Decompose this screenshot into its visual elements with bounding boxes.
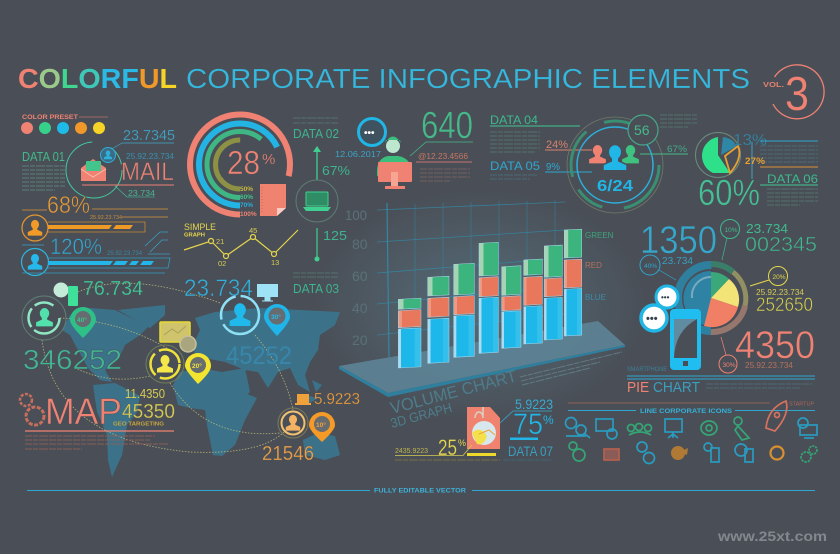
icon: chat bubbles: ••• (646, 313, 658, 325)
line chart: simple graph: 13 (271, 258, 279, 267)
panel: pie chart: 252650 (756, 295, 813, 316)
panel: data 07: DATA 07 (508, 444, 553, 459)
panel: data 04 05 team: 56 (634, 122, 650, 138)
chart grid (377, 200, 565, 357)
panel: mail (22, 127, 175, 198)
panel: mail: MAIL (121, 158, 174, 186)
panel: 640 person (335, 105, 473, 189)
icon: chat bubbles: ••• (661, 293, 670, 302)
panel: data 06 pie: 27% (745, 156, 765, 166)
icon: smartphone (670, 309, 701, 370)
bars (398, 229, 582, 368)
panel: pie chart: 23.734 (746, 221, 788, 236)
axis labels (345, 207, 368, 348)
icon: note page (260, 184, 286, 216)
map node: green: 346252 (23, 344, 122, 375)
map node: orange: 10° (316, 421, 326, 429)
panel: data 07: 2435.9223 (395, 446, 428, 455)
chart: 3D volume chart (315, 190, 645, 431)
line chart: simple graph: 21 (216, 237, 224, 246)
map node: blue: 45252 (226, 342, 292, 370)
panel: pie chart: 1350 (640, 219, 717, 262)
icon row 2 (569, 442, 585, 461)
panel: progress 68 percent: 68% (47, 192, 90, 219)
panel: 640 person: 640 (421, 105, 473, 147)
panel: pie chart (627, 219, 817, 396)
panel: data 06 pie (696, 132, 818, 213)
map node: yellow: 20° (192, 362, 202, 370)
panel: pie chart: 40% (644, 263, 657, 270)
title: colorful: COLORFUL (18, 63, 177, 94)
line chart: simple graph: 02 (218, 259, 226, 268)
panel: data 04 05 team (490, 115, 698, 213)
panel: radial chart 28 percent: 50% (240, 186, 253, 193)
icon: document (467, 407, 500, 449)
panel: pie chart: 25.92.23.734 (756, 287, 804, 297)
map node: green (22, 278, 143, 375)
panel: data 06 pie: DATA 06 (767, 172, 818, 186)
panel: map heading: 45350 (122, 401, 175, 423)
world map (62, 305, 340, 477)
panel: data 04 05 team: 6/24 (597, 178, 633, 195)
panel: data 07: 25 (438, 435, 457, 460)
chart caption (388, 352, 622, 431)
line chart: simple graph: 45 (249, 226, 257, 235)
panel: 640 person: 12.06.2017 (335, 149, 381, 159)
platform (339, 321, 625, 397)
line chart: simple graph: SIMPLE (184, 222, 216, 233)
panel: pie chart: 20% (772, 274, 786, 281)
map node: orange (262, 391, 360, 465)
panel: map heading: 11.4350 (125, 387, 165, 401)
panel: mail: 23.7345 (123, 127, 175, 144)
panel: progress 68 percent: 25.92.23.734 (90, 215, 122, 221)
title: corporate infographic elements: CORPORATE INFOGRAPHIC ELEMENTS (186, 63, 750, 94)
map node: orange: 5.9223 (314, 391, 360, 408)
icon: chat bubbles (641, 286, 678, 331)
panel: map heading (20, 387, 175, 449)
panel: data 02 and 03 column: DATA 03 (293, 281, 339, 296)
panel: progress 120 percent: 25.92.23.734 (107, 251, 143, 257)
panel: data 07 (395, 397, 554, 460)
panel: radial chart 28 percent (190, 114, 290, 218)
panel: pie chart: 4350 (735, 324, 815, 367)
map node: blue: 23.734 (184, 275, 253, 302)
chart legend (585, 231, 614, 302)
panel: data 06 pie: 60% (698, 172, 760, 213)
axis labels: 20 (352, 332, 368, 348)
panel: line corporate icons: LINE CORPORATE ICONS (640, 408, 732, 415)
map connection curves (42, 283, 293, 452)
chart caption: 3D GRAPH (389, 400, 454, 431)
footer rule and caption: FULLY EDITABLE VECTOR (374, 488, 466, 494)
panel: pie chart: PIE CHART (627, 379, 700, 396)
panel: progress 120 percent: 120% (50, 234, 102, 259)
panel: pie chart: 30% (722, 362, 736, 369)
map node: blue (184, 275, 292, 370)
panel: radial chart 28 percent: % (262, 151, 275, 168)
panel: 640 person: ••• (364, 128, 375, 139)
volume badge: VOL. (763, 80, 784, 89)
axis labels: 40 (352, 300, 368, 316)
panel: data 07: 5.9223 (515, 397, 553, 412)
axis labels: 80 (352, 236, 368, 252)
panel: pie chart: 10% (724, 227, 738, 234)
panel: progress 68 percent (22, 192, 168, 241)
panel: radial chart 28 percent: 100% (240, 211, 257, 218)
panel: 640 person: @12.23.4566 (418, 152, 469, 161)
panel: data 04 05 team: 67% (667, 144, 688, 155)
panel: mail: 25.92.23.734 (126, 152, 175, 161)
panel: pie chart: SMARTPHONE (627, 366, 668, 373)
panel: color preset: COLOR PRESET (22, 114, 78, 121)
axis labels: 100 (345, 207, 367, 223)
panel: line corporate icons (566, 401, 817, 464)
panel: color preset (21, 114, 108, 134)
panel: data 04 05 team: DATA 04 (490, 115, 539, 127)
panel: data 04 05 team: 9% (546, 162, 560, 173)
icon row 1 (566, 418, 617, 439)
map node: blue: 30° (271, 313, 281, 321)
panel: pie chart: 002345 (745, 234, 817, 256)
panel: data 04 05 team: 24% (546, 139, 568, 151)
map node: green: 40° (77, 316, 87, 324)
panel: data 02 and 03 column (293, 118, 350, 296)
panel: data 02 and 03 column: DATA 02 (293, 126, 339, 141)
panel: map heading: MAP (45, 391, 122, 432)
line chart: simple graph: GRAPH (184, 232, 205, 238)
chart legend: GREEN (585, 231, 614, 240)
panel: map heading: GEO TARGETING (113, 422, 164, 428)
volume badge (763, 65, 824, 121)
panel: mail: DATA 01 (22, 149, 65, 164)
panel: data 07: % (543, 413, 554, 427)
map node: yellow (146, 322, 211, 384)
panel: data 07: % (458, 438, 466, 448)
panel: radial chart 28 percent: 28 (227, 144, 260, 181)
panel: data 06 pie: 13% (733, 132, 767, 149)
volume badge: 3 (785, 68, 809, 121)
icon: rocket (766, 401, 787, 431)
line chart: simple graph (184, 222, 298, 268)
panel: pie chart: 25.92.23.734 (745, 360, 793, 370)
watermark: www.25xt.com (717, 529, 827, 544)
panel: data 04 05 team: DATA 05 (490, 159, 540, 173)
chart legend: BLUE (585, 293, 606, 302)
panel: data 02 and 03 column: 125 (323, 228, 347, 243)
title (18, 63, 750, 94)
panel: radial chart 28 percent: 70% (240, 202, 253, 209)
panel: radial chart 28 percent: 60% (240, 194, 253, 201)
panel: pie chart: 23.734 (662, 256, 693, 267)
panel: progress 120 percent (22, 232, 170, 276)
chart caption: VOLUME CHART (388, 367, 519, 418)
map node: green: 76.734 (83, 278, 143, 300)
map node: orange: 21546 (262, 443, 314, 465)
panel: data 02 and 03 column: 67% (322, 164, 350, 178)
panel: line corporate icons: STARTUP (789, 402, 814, 408)
panel: data 07: 75 (513, 408, 543, 441)
chart legend: RED (585, 261, 602, 270)
panel: mail: 23.734 (128, 188, 155, 198)
axis labels: 60 (352, 268, 368, 284)
